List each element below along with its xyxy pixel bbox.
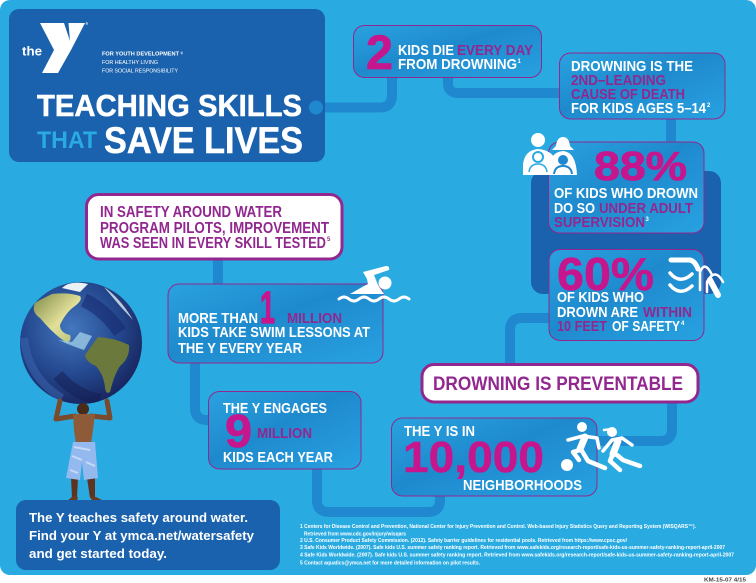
connector lines [195, 75, 672, 512]
stat: 1 million swim lessons: KIDS TAKE SWIM LESSONS AT [178, 324, 370, 341]
callout: drowning is preventable: DROWNING IS PREVENTABLE [433, 374, 683, 395]
footnotes: 5 Contact aquatics@ymca.net for more detailed information on pilot results. [300, 560, 481, 566]
title: TEACHING SKILLS [37, 89, 302, 123]
stat: 60 percent: OF SAFETY [612, 318, 680, 335]
stat: 60 percent: WITHIN [643, 304, 692, 321]
stat: 2nd leading cause of death [560, 53, 725, 119]
icon: family [523, 133, 577, 175]
dark backing panel [531, 171, 721, 294]
stat: Y engages 9 million: MILLION [257, 425, 312, 442]
connector dot [309, 100, 323, 114]
stat: Y engages 9 million: 9 [225, 405, 252, 457]
call to action panel [16, 500, 280, 570]
icon: swimmer [339, 266, 409, 301]
stat: 1 million swim lessons: THE Y EVERY YEAR [178, 340, 302, 357]
stat: 2nd leading cause of death: CAUSE OF DEATH [571, 86, 685, 103]
illustration: child holding globe [20, 282, 142, 501]
stat: 60 percent: 10 FEET [557, 318, 607, 335]
tagline: FOR HEALTHY LIVING [102, 60, 158, 66]
YMCA logo [22, 22, 88, 73]
footnotes: Retrieved from www.cdc.gov/injury/wisqars [304, 532, 406, 538]
stat: Y engages 9 million: KIDS EACH YEAR [223, 449, 333, 466]
title: THAT [37, 127, 97, 154]
call to action panel: The Y teaches safety around water. [29, 510, 248, 525]
stat: Y engages 9 million: THE Y ENGAGES [223, 400, 327, 417]
stat: 1 million swim lessons: 1 [260, 282, 275, 333]
footnotes: 3 Safe Kids Worldwide. (2007). Safe kids U.S. summer safety ranking report. Retrieved from www.safekids.org/research-report/safe-kids-us-summer-safety-ranking-report-april-2007 [300, 545, 725, 551]
stat: 88 percent: DO SO [554, 200, 595, 217]
callout: in safety around water: WAS SEEN IN EVERY SKILL TESTED [100, 235, 326, 252]
stat: 88 percent: UNDER ADULT [599, 200, 693, 217]
callout: in safety around water: IN SAFETY AROUND WATER [100, 204, 282, 221]
icon: running children [561, 422, 640, 471]
stat: 1 million swim lessons [168, 282, 383, 363]
stat: 2 kids die every day: 2 [366, 27, 393, 80]
stat: 2 kids die every day: FROM DROWNING [398, 56, 517, 73]
tagline: ® [180, 52, 184, 56]
stat: 60 percent [549, 248, 704, 340]
stat: 88 percent: OF KIDS WHO DROWN [554, 185, 698, 202]
stat: 10,000 neighborhoods: THE Y IS IN [404, 423, 475, 440]
callout: in safety around water: 5 [327, 237, 331, 243]
stat: 1 million swim lessons: MILLION [287, 310, 342, 327]
stat: 60 percent: OF KIDS WHO [557, 289, 644, 306]
stat: 60 percent: 4 [681, 321, 685, 327]
YMCA logo: YMCA [60, 61, 68, 72]
stat: 60 percent: 60% [557, 248, 654, 300]
stat: 88 percent: 88% [594, 143, 687, 189]
stat: 10,000 neighborhoods: 10,000 [403, 433, 544, 482]
stat: 2nd leading cause of death: 2 [707, 103, 711, 109]
stat: 60 percent: DROWN ARE [557, 304, 638, 321]
stat: 2nd leading cause of death: 2ND–LEADING [571, 72, 666, 89]
stat: Y engages 9 million [208, 392, 361, 469]
tagline: FOR YOUTH DEVELOPMENT [102, 52, 180, 58]
stat: 2 kids die every day: 1 [518, 59, 522, 65]
stat: 88 percent: 3 [646, 217, 650, 223]
boy [56, 401, 110, 501]
stat: 10,000 neighborhoods [392, 418, 597, 496]
stat: 1 million swim lessons: MORE THAN [178, 310, 258, 327]
footnotes: 1 Centers for Disease Control and Prevention, National Center for Injury Prevention and Control. Web-based Injury Statistics Query and Reporting System (WISQARS™). [300, 524, 697, 530]
footnotes [300, 524, 734, 566]
header panel [9, 9, 325, 162]
stat: 2nd leading cause of death: FOR KIDS AGES 5–14 [571, 100, 707, 117]
tagline [102, 52, 184, 74]
callout: drowning is preventable [422, 364, 698, 402]
globe [20, 282, 142, 404]
call to action panel: and get started today. [29, 546, 167, 561]
stat: 88 percent [548, 142, 704, 233]
footnotes: 2 U.S. Consumer Product Safety Commission. (2012). Safety barrier guidelines for residential pools. Retrieved from https://www.cpsc.gov/ [300, 538, 628, 544]
stat: 88 percent: SUPERVISION [554, 214, 645, 231]
tagline: FOR SOCIAL RESPONSIBILITY [102, 68, 179, 74]
stat: 2nd leading cause of death: DROWNING IS THE [571, 58, 693, 75]
YMCA logo: the [22, 44, 42, 58]
stat: 2 kids die every day: EVERY DAY [457, 42, 533, 59]
stat: 2 kids die every day: KIDS DIE [398, 42, 454, 59]
stat: 2 kids die every day [354, 26, 542, 80]
icon: pool ladder [670, 260, 723, 295]
stat: 10,000 neighborhoods: NEIGHBORHOODS [463, 477, 582, 494]
title: SAVE LIVES [104, 120, 303, 161]
YMCA logo: ® [86, 22, 88, 26]
call to action panel: Find your Y at ymca.net/watersafety [29, 528, 255, 543]
callout: in safety around water [86, 194, 342, 259]
callout: in safety around water: PROGRAM PILOTS, IMPROVEMENT [100, 220, 329, 237]
title [37, 89, 303, 161]
footnotes: 4 Safe Kids Worldwide. (2007). Safe kids U.S. summer safety ranking report. Retrieved from www.safekids.org/research-report/safe-kids-us-summer-safety-ranking-report-april-2007 [300, 552, 734, 558]
